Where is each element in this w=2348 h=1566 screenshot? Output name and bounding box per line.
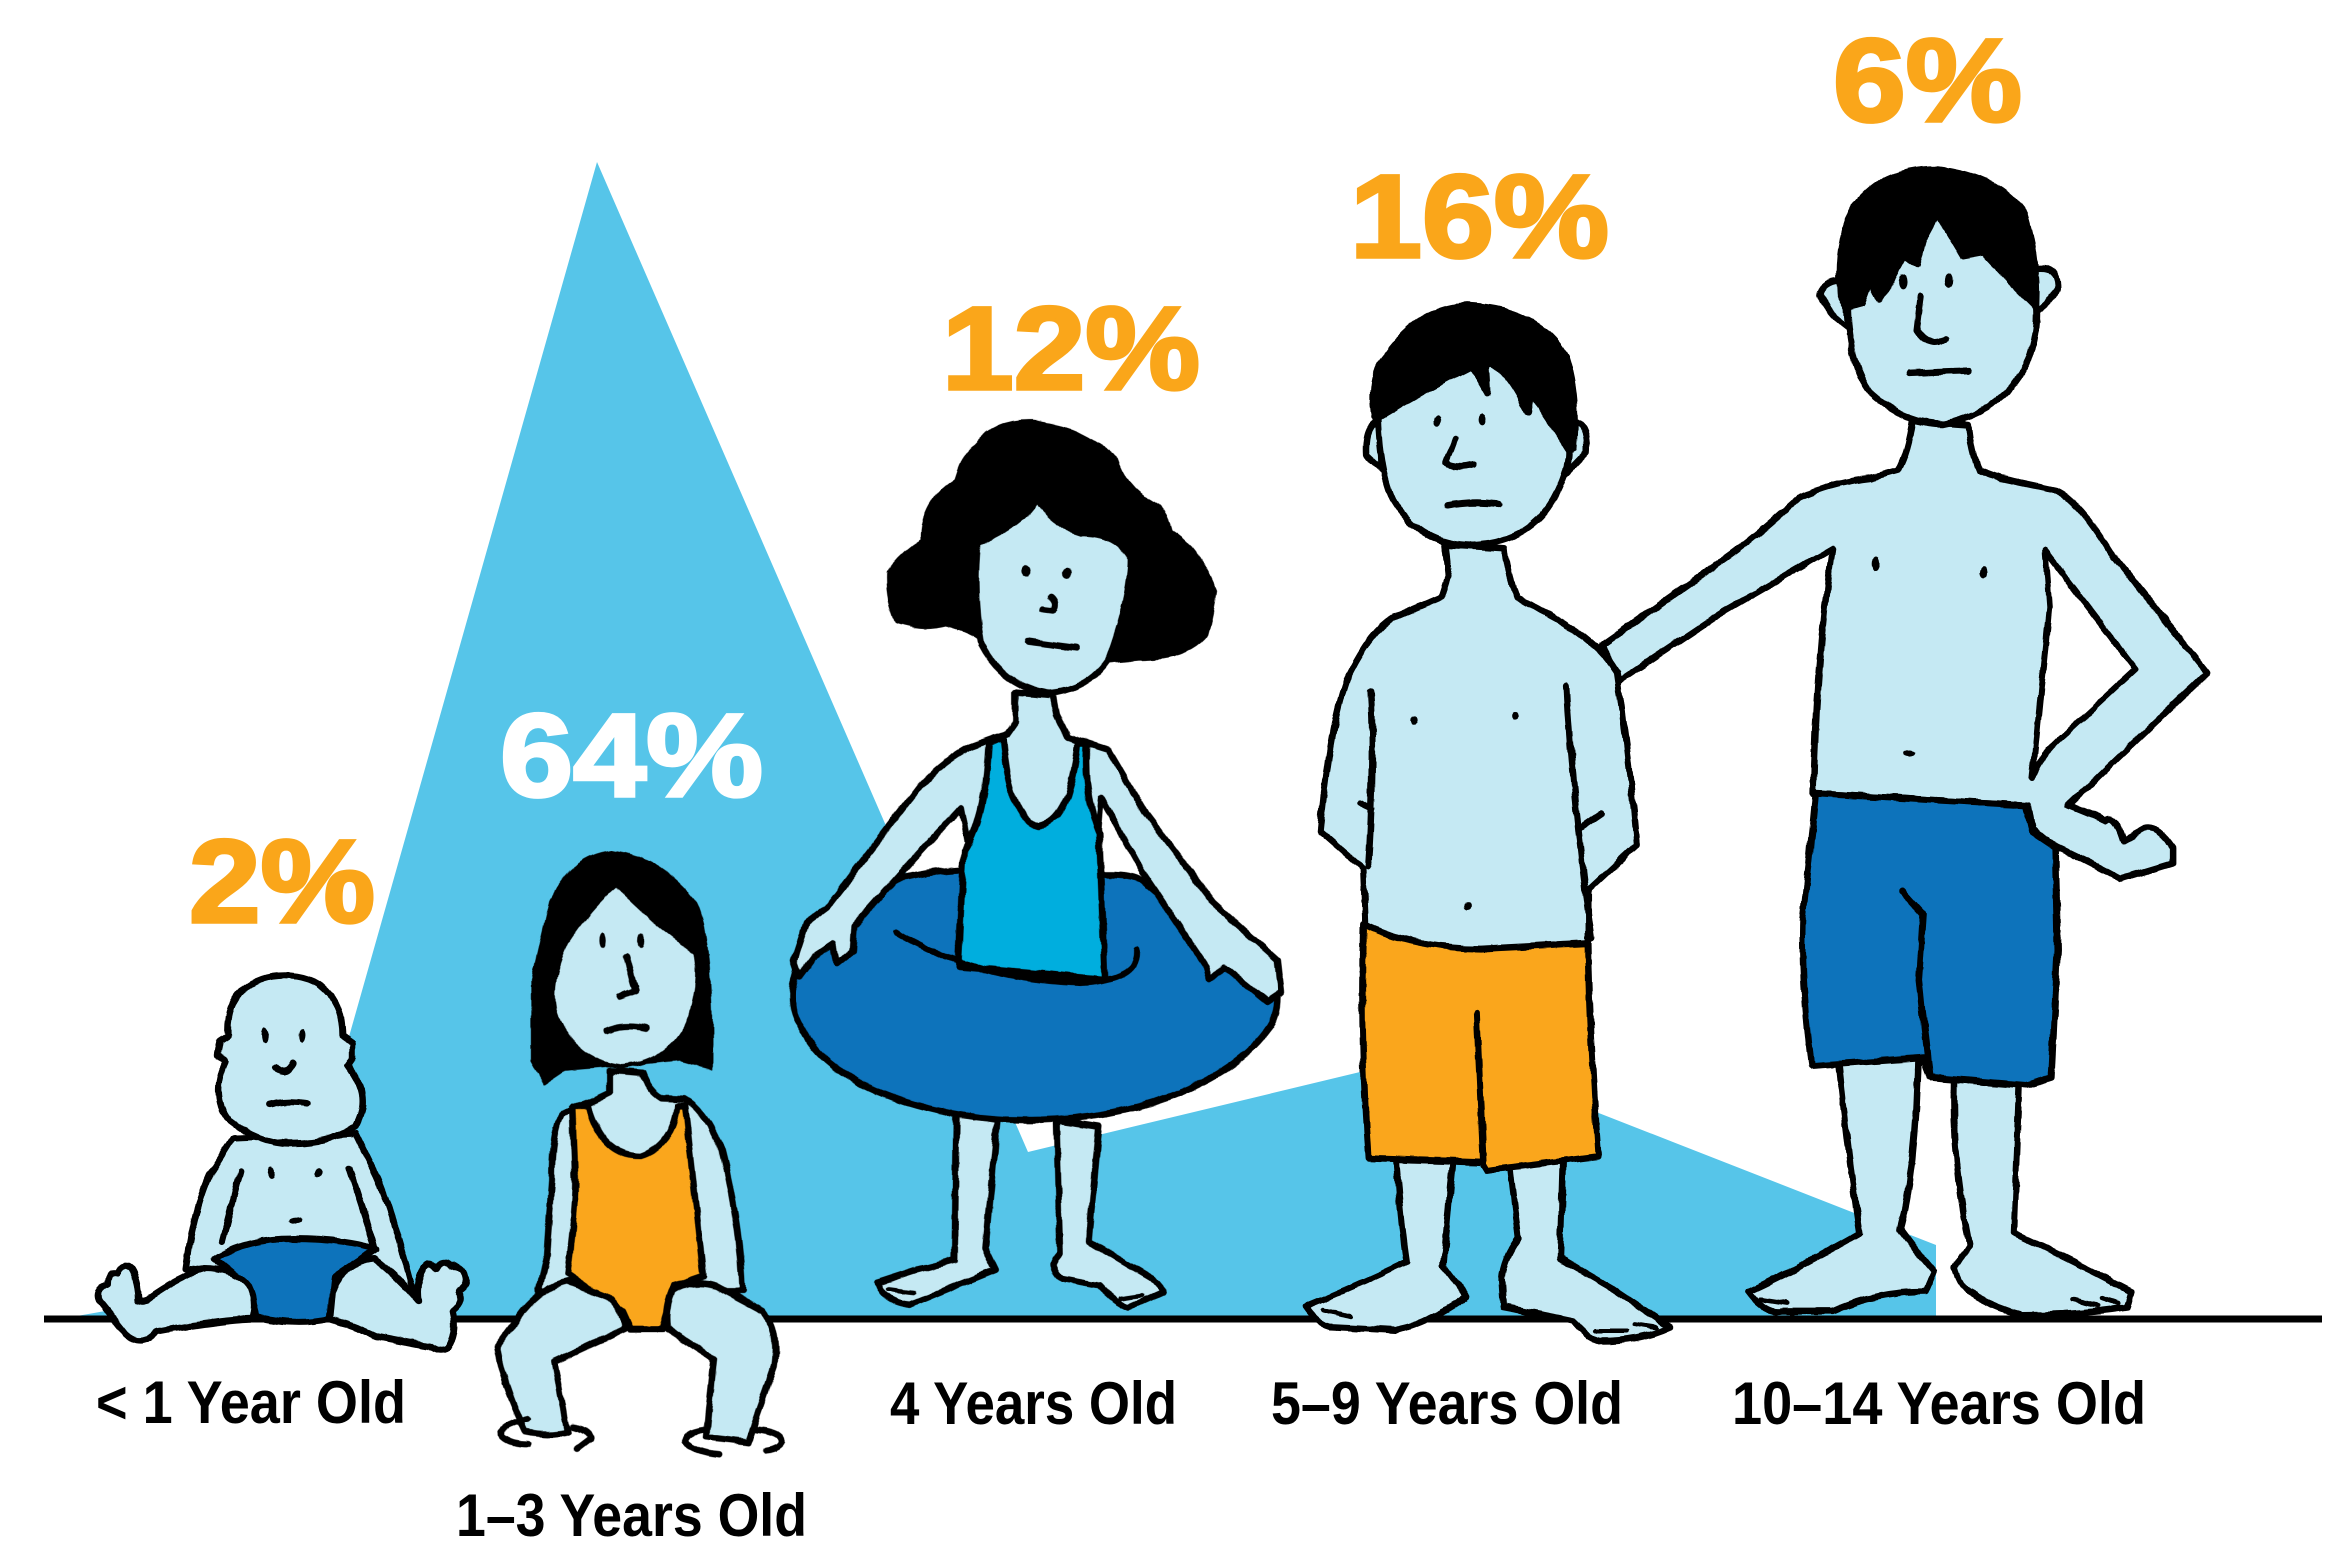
label: 5-9 years: 5–9 Years Old: [1271, 1370, 1623, 1437]
face: [1378, 363, 1568, 545]
illustrated children: [98, 167, 2207, 1454]
head: [217, 976, 363, 1143]
face: [553, 885, 697, 1067]
diaper: [214, 1239, 377, 1322]
percentage: 1-3 years: 64%: [500, 690, 763, 822]
hair: [531, 850, 712, 1085]
ears: [1820, 268, 2058, 331]
arm lines: [1360, 687, 1602, 938]
ears: [1366, 421, 1587, 473]
figure: child 4 years with swim ring: [792, 419, 1281, 1308]
label: 10-14 years: 10–14 Years Old: [1732, 1370, 2146, 1437]
right leg: [666, 1283, 775, 1442]
facial features: [1899, 274, 1969, 373]
ring inner edge: [896, 932, 1137, 983]
hair: [1372, 304, 1576, 452]
water ripples: [501, 1419, 782, 1454]
swim ring: [792, 870, 1277, 1120]
area chart: blue age distribution: [60, 162, 1936, 1319]
gap between arm and torso: [2032, 551, 2136, 778]
shorts: [1803, 794, 2058, 1085]
chest marks: [267, 1168, 322, 1224]
torso and arms: [539, 1071, 743, 1291]
facial features: [262, 1027, 306, 1105]
swimsuit: [958, 737, 1105, 980]
label: 4 years: 4 Years Old: [890, 1370, 1177, 1437]
label: under 1 year: < 1 Year Old: [96, 1369, 406, 1436]
hair: [887, 419, 1217, 664]
label: 1-3 years: 1–3 Years Old: [456, 1482, 807, 1549]
swimsuit: [567, 1106, 703, 1329]
shorts: [1362, 924, 1598, 1170]
facial features: [1021, 566, 1076, 648]
percentage: under 1 year: 2%: [189, 816, 375, 948]
arm lines: [222, 1169, 376, 1249]
facial features: [599, 933, 646, 1031]
percentage: 5-9 years: 16%: [1350, 151, 1609, 283]
hair: [1838, 167, 2038, 315]
percentage: 4 years: 12%: [942, 283, 1200, 415]
chest marks: [1872, 557, 1987, 756]
legs: [1305, 1141, 1670, 1341]
facial features: [1434, 414, 1498, 505]
figure: child under 1 year: [98, 976, 466, 1351]
figure: child 5-9 years: [1305, 304, 1670, 1341]
baseline axis: [44, 1316, 2322, 1322]
face: [1847, 214, 2037, 424]
figure: child 1-3 years: [497, 850, 782, 1454]
percentage: 10-14 years: 6%: [1833, 15, 2022, 147]
face: [976, 498, 1131, 694]
arms and neck: [794, 693, 1281, 1002]
torso and arms: [1601, 420, 2207, 879]
left leg: [497, 1281, 625, 1434]
legs: [1748, 1042, 2131, 1315]
legs: [878, 1113, 1164, 1308]
chest marks: [1410, 711, 1519, 909]
torso and arms: [1320, 545, 1637, 969]
torso: [186, 1133, 413, 1291]
figure: child 10-14 years: [1601, 167, 2207, 1315]
left leg: [98, 1266, 253, 1341]
right leg: [329, 1259, 466, 1351]
